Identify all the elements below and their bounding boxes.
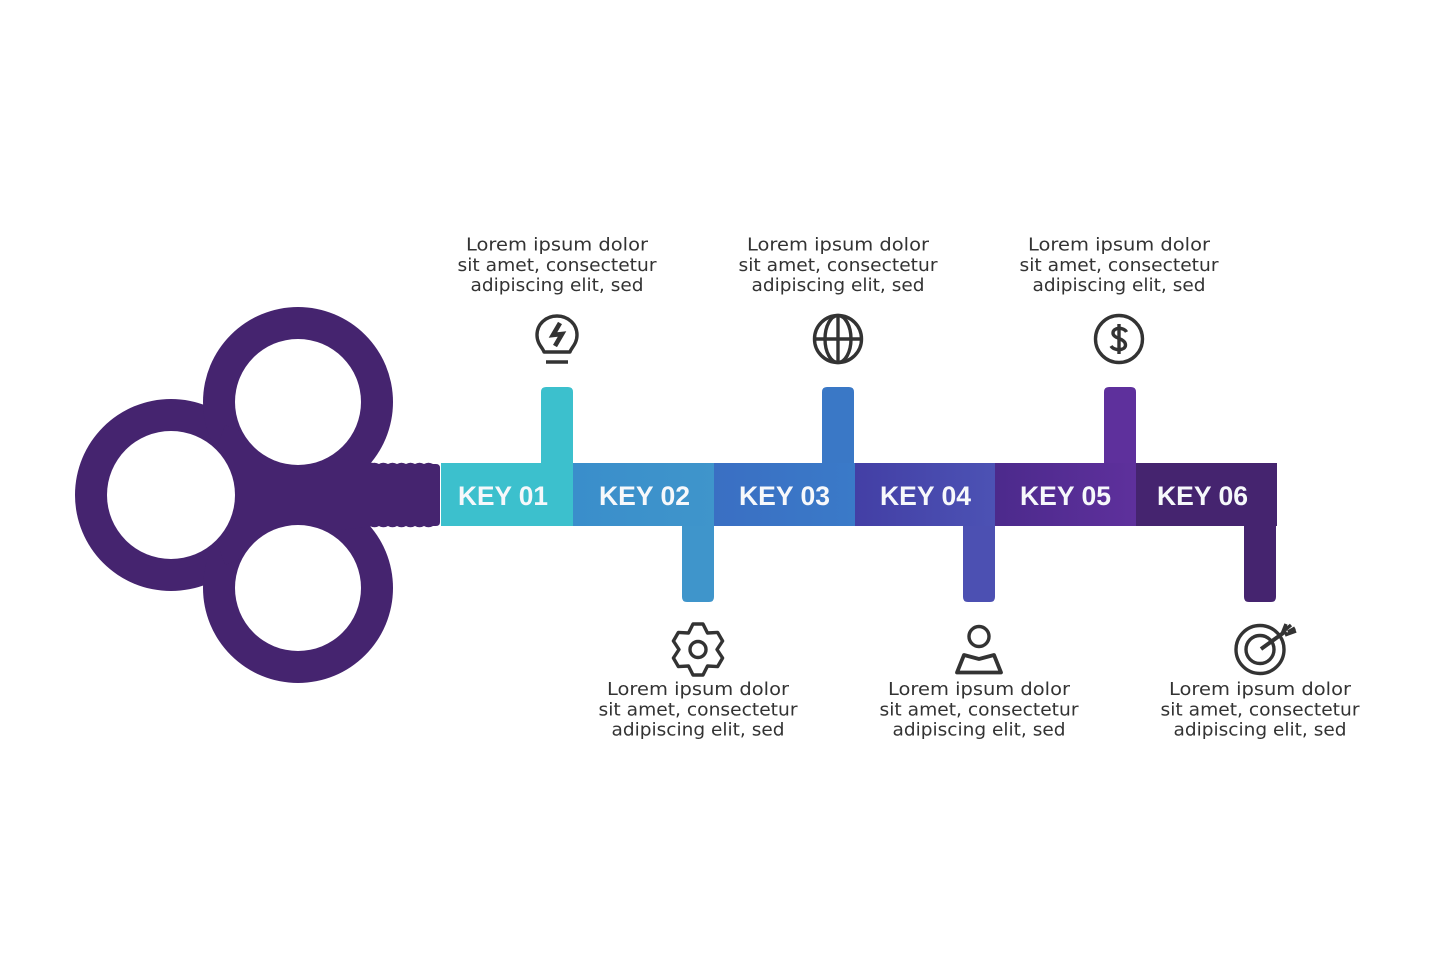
text block 04: adipiscing elit, sed xyxy=(892,720,1066,740)
text block 04: Lorem ipsum dolor xyxy=(888,679,1071,700)
segment: KEY 03: KEY 03 xyxy=(739,481,830,511)
segment: KEY 04: KEY 04 xyxy=(880,481,971,511)
text block 04 xyxy=(880,679,1079,740)
text block 06: sit amet, consectetur xyxy=(1160,700,1360,720)
icon: light bulb xyxy=(537,316,577,362)
hole: bottom xyxy=(235,525,361,651)
segment: KEY 02 xyxy=(573,463,714,526)
text block 05: sit amet, consectetur xyxy=(1020,255,1219,276)
tooth 04 xyxy=(963,525,995,602)
segment: KEY 02: KEY 02 xyxy=(599,481,690,511)
text block 02: Lorem ipsum dolor xyxy=(607,679,790,700)
segment: KEY 06: KEY 06 xyxy=(1157,481,1248,511)
text block 03: adipiscing elit, sed xyxy=(752,275,924,296)
handle hub xyxy=(200,425,374,565)
text block 02 xyxy=(598,679,798,740)
icon: person xyxy=(957,626,1001,672)
icon: dollar xyxy=(1096,316,1142,362)
text block 06: adipiscing elit, sed xyxy=(1174,720,1346,740)
key handle xyxy=(75,307,440,683)
text block 01: sit amet, consectetur xyxy=(458,255,657,276)
text block 03: sit amet, consectetur xyxy=(738,255,938,276)
text block 01: Lorem ipsum dolor xyxy=(466,234,649,256)
icon: gear xyxy=(673,624,723,675)
handle ring: left xyxy=(75,399,267,591)
segment: KEY 03 xyxy=(714,463,855,526)
text block 03 xyxy=(738,234,938,296)
segment: KEY 06 xyxy=(1136,463,1277,526)
hole: left xyxy=(107,431,235,559)
segment: KEY 04 xyxy=(855,463,995,526)
segment: KEY 05: KEY 05 xyxy=(1020,481,1111,511)
handle ring: bottom xyxy=(203,493,393,683)
tooth 02 xyxy=(682,525,714,602)
segment: KEY 01 xyxy=(441,463,573,526)
tooth 03 xyxy=(822,387,854,464)
text block 03: Lorem ipsum dolor xyxy=(747,234,930,256)
text block 02: adipiscing elit, sed xyxy=(612,720,784,740)
handle ring: top xyxy=(203,307,393,497)
text block 01 xyxy=(458,234,657,296)
tooth 05 xyxy=(1104,387,1136,464)
text block 05: adipiscing elit, sed xyxy=(1032,275,1206,296)
text block 02: sit amet, consectetur xyxy=(598,700,798,720)
text block 01: adipiscing elit, sed xyxy=(470,275,644,296)
segment: KEY 01: KEY 01 xyxy=(458,481,548,511)
text block 06 xyxy=(1160,679,1360,740)
icon: globe xyxy=(814,316,862,362)
key collar xyxy=(370,463,440,527)
text block 05 xyxy=(1020,234,1219,296)
icon: target xyxy=(1236,624,1296,674)
text block 05: Lorem ipsum dolor xyxy=(1028,234,1211,256)
tooth 01 xyxy=(541,387,573,464)
text block 04: sit amet, consectetur xyxy=(880,700,1079,720)
hole: top xyxy=(235,339,361,465)
text block 06: Lorem ipsum dolor xyxy=(1169,679,1352,700)
tooth 06 xyxy=(1244,525,1276,602)
segment: KEY 05 xyxy=(995,463,1136,526)
